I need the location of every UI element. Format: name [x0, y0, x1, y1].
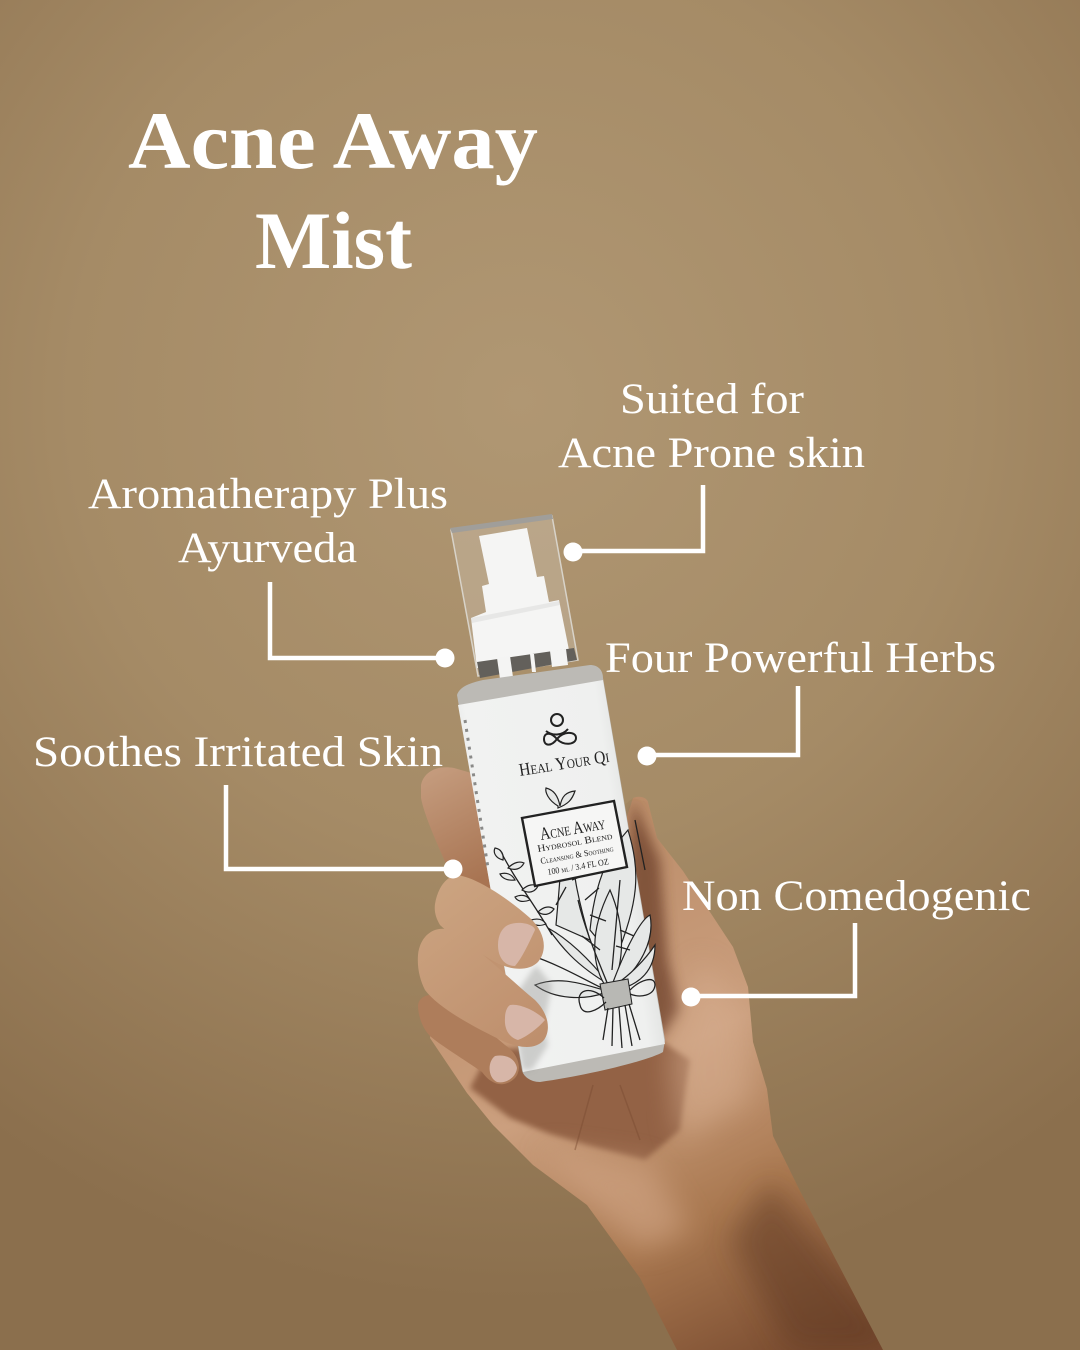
product small print: Cleansing & Soothing: [540, 843, 615, 866]
product small print: Hydrosol Blend: [537, 831, 613, 855]
bouquet illustration: [494, 820, 655, 1048]
frosted bottle body: [457, 665, 665, 1082]
callout: suited for acne prone skin: Acne Prone skin: [558, 430, 865, 477]
index finger behind bottle: [421, 767, 505, 890]
callout: soothes irritated skin: [33, 729, 462, 878]
white label: [458, 680, 665, 1072]
callout: soothes irritated skin: Soothes Irritated Skin: [33, 729, 443, 776]
middle finger: [435, 875, 544, 969]
callout: four powerful herbs: Four Powerful Herbs: [605, 635, 996, 682]
top sprig: [546, 788, 575, 808]
ring finger: [418, 929, 548, 1047]
brand name: Heal Your Qi: [517, 746, 611, 780]
callout: aromatherapy plus ayurveda: Aromatherapy Plus: [88, 471, 448, 518]
callout: suited for acne prone skin: Suited for: [620, 376, 804, 423]
product bottle: [450, 514, 665, 1082]
product small print: 100 ml / 3.4 FL OZ: [547, 856, 609, 877]
product title box: [522, 801, 627, 886]
title: [128, 95, 538, 286]
callout: non comedogenic: [682, 873, 1031, 1006]
callout: aromatherapy plus ayurveda: [88, 471, 454, 668]
product small print: [537, 831, 615, 877]
hand: fingers in front of bottle: [418, 875, 552, 1084]
clear cap: [451, 516, 578, 676]
hand holding bottle: back of hand and wrist: [421, 767, 900, 1350]
callout: non comedogenic: Non Comedogenic: [682, 873, 1031, 920]
pinky: [418, 995, 519, 1084]
side print marks: [465, 720, 488, 868]
title: Acne Away: [128, 95, 538, 186]
callout: four powerful herbs: [605, 635, 996, 766]
collar: [477, 648, 577, 678]
title: Mist: [255, 195, 412, 286]
callout: suited for acne prone skin: [558, 376, 865, 562]
label shadow from fingers: [512, 965, 552, 1070]
product title text: Acne Away: [538, 813, 607, 844]
callout: aromatherapy plus ayurveda: Ayurveda: [178, 525, 357, 572]
nails: [490, 923, 545, 1082]
pump nozzle: [471, 528, 570, 668]
brand logo: [544, 714, 576, 745]
